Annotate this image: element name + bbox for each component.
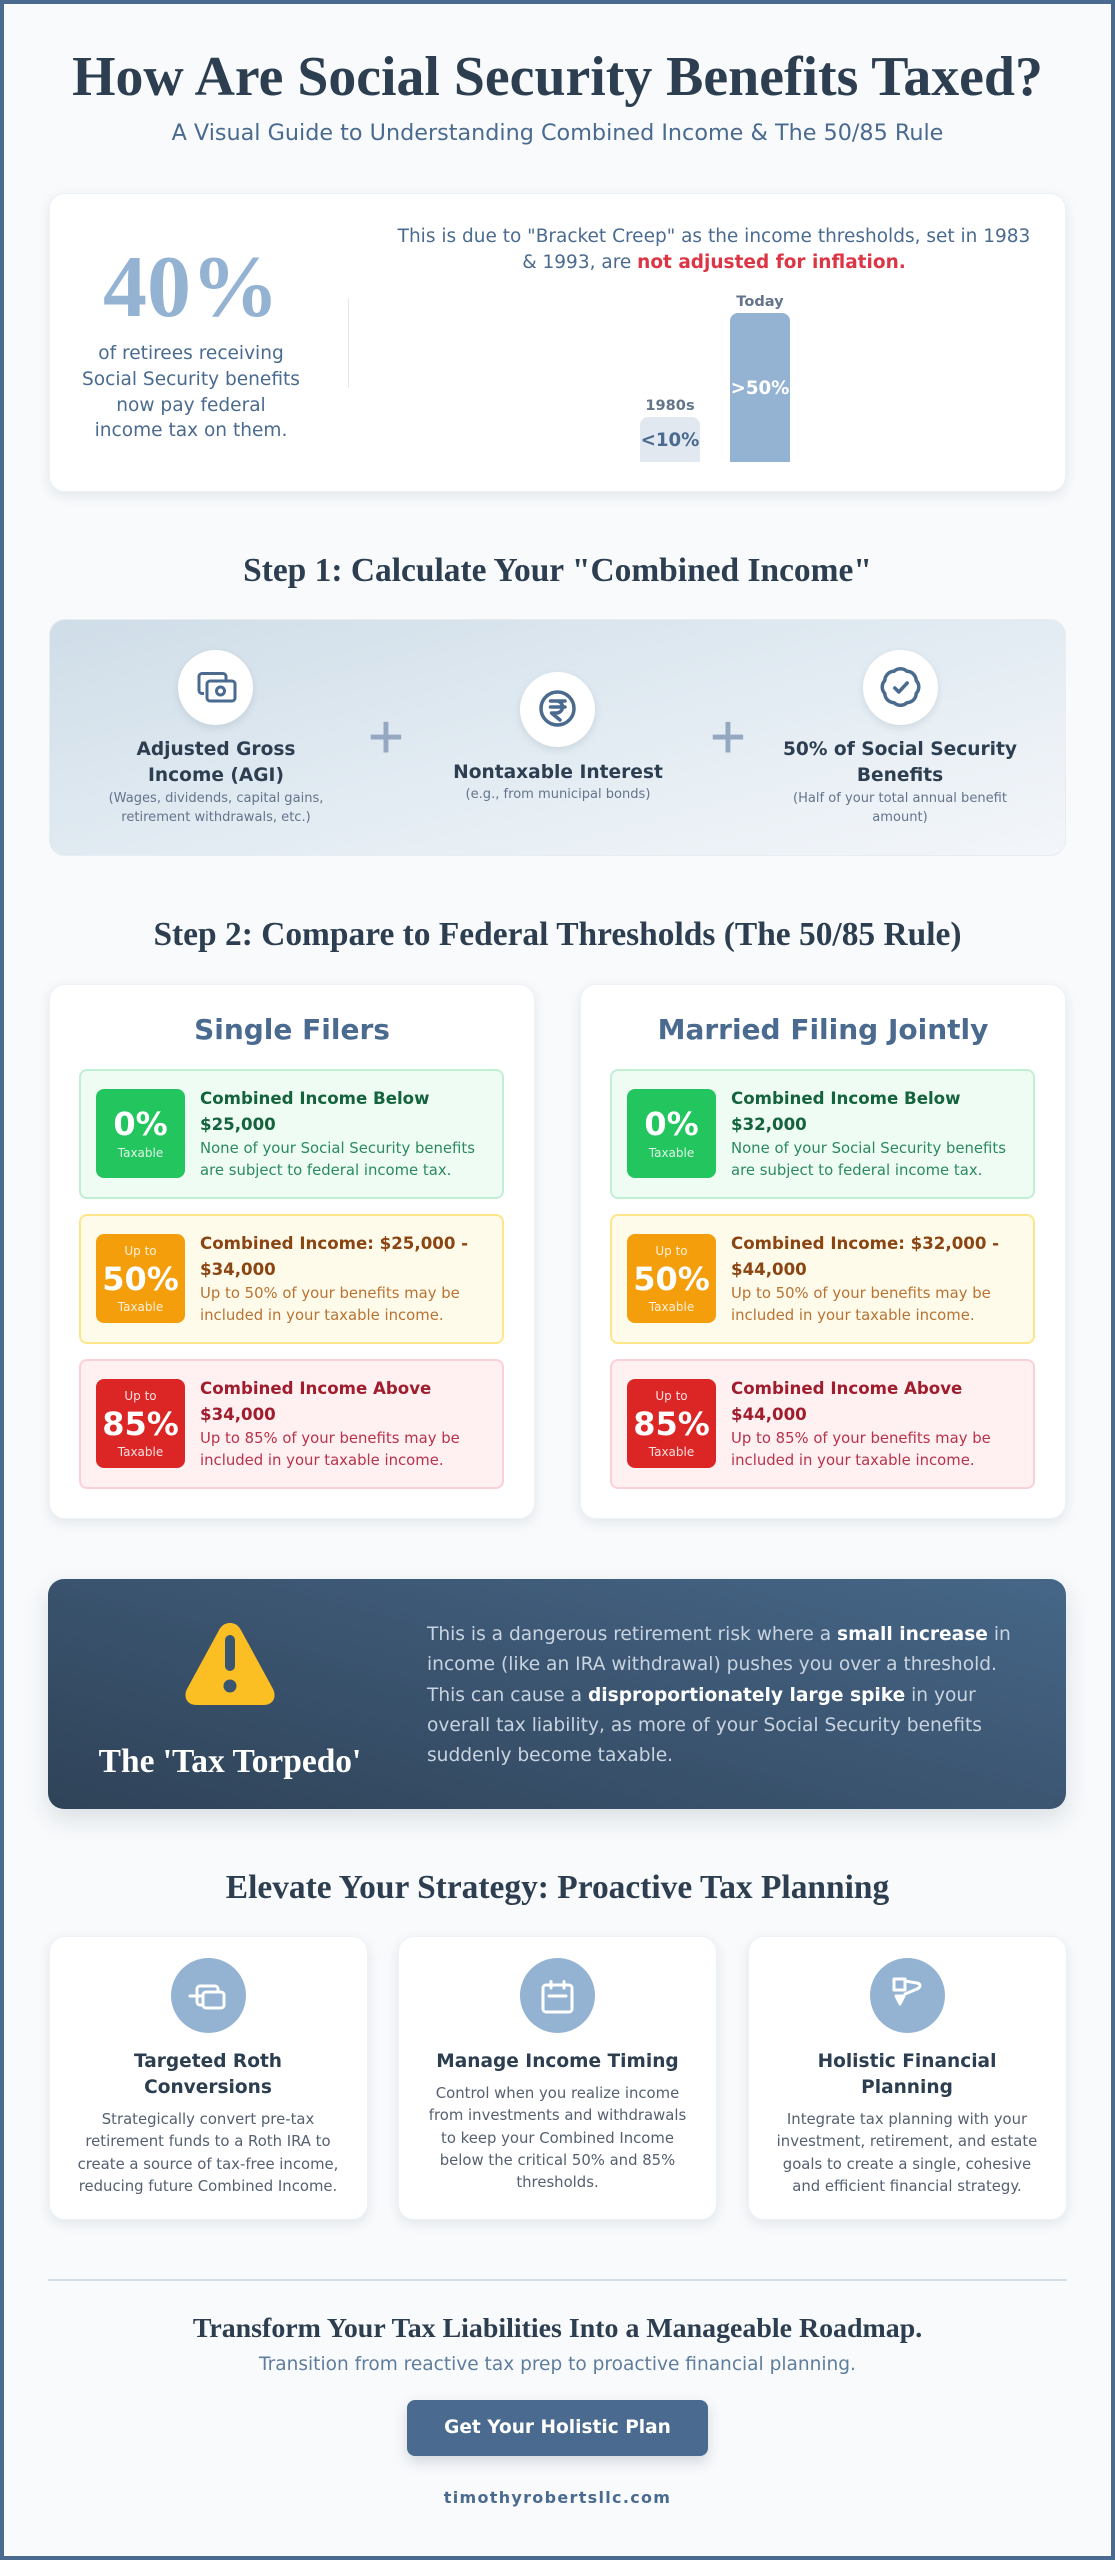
stat description bbox=[82, 343, 300, 441]
stat description: income tax on them. bbox=[95, 420, 287, 441]
tier heading: Combined Income: $25,000 - bbox=[200, 1234, 468, 1253]
tier heading: $34,000 bbox=[200, 1260, 276, 1279]
strategy description: to keep your Combined Income bbox=[441, 2129, 674, 2147]
strategy description bbox=[777, 2110, 1037, 2195]
note: nontaxable interest: (e.g., from municipal bonds) bbox=[466, 787, 650, 802]
item: AGI bbox=[109, 650, 323, 825]
item: half of social security bbox=[783, 650, 1017, 825]
strategy description: Integrate tax planning with your bbox=[787, 2110, 1027, 2128]
call to action button bbox=[407, 2400, 708, 2456]
badge: 0%: 0% bbox=[644, 1105, 699, 1143]
tier description: are subject to federal income tax. bbox=[731, 1161, 982, 1179]
heading: step 2: Step 2: Compare to Federal Thresholds (The 50/85 Rule) bbox=[153, 916, 962, 953]
badge: 50%: Taxable bbox=[649, 1300, 694, 1314]
badge: 85% bbox=[627, 1379, 716, 1468]
stat description: now pay federal bbox=[116, 395, 266, 416]
label: AGI bbox=[136, 739, 296, 786]
tier description bbox=[731, 1284, 991, 1324]
tier description: Up to 85% of your benefits may be bbox=[200, 1429, 460, 1447]
tier heading: $44,000 bbox=[731, 1260, 807, 1279]
note: AGI bbox=[109, 791, 323, 825]
tier description: Up to 85% of your benefits may be bbox=[731, 1429, 991, 1447]
vertical divider bbox=[348, 298, 349, 388]
badge: 50%: Up to bbox=[655, 1244, 688, 1258]
badge: 50% bbox=[96, 1234, 185, 1323]
strategy description bbox=[78, 2110, 338, 2195]
card: holistic planning bbox=[748, 1936, 1066, 2220]
callout body bbox=[426, 1624, 1011, 1766]
note: half of social security: amount) bbox=[872, 810, 928, 825]
tier: 85 percent bbox=[610, 1359, 1035, 1489]
strategy description: Control when you realize income bbox=[436, 2084, 679, 2102]
website: timothyrobertsllc.com bbox=[444, 2488, 671, 2507]
badge: 0%: Taxable bbox=[118, 1146, 163, 1160]
title: How Are Social Security Benefits Taxed? bbox=[72, 46, 1043, 108]
label: AGI: Adjusted Gross bbox=[136, 739, 296, 760]
callout body: This is a dangerous retirement risk where a small increase in bbox=[427, 1624, 1011, 1645]
tier heading bbox=[200, 1234, 468, 1279]
note: half of social security: (Half of your total annual benefit bbox=[793, 791, 1007, 806]
icon: calendar bbox=[520, 1958, 595, 2033]
card: income timing bbox=[398, 1936, 717, 2220]
footer heading: Transform Your Tax Liabilities Into a Manageable Roadmap. bbox=[193, 2313, 922, 2344]
strategy description: retirement funds to a Roth IRA to bbox=[85, 2132, 331, 2150]
tier heading bbox=[731, 1379, 962, 1424]
badge: 0%: 0% bbox=[113, 1105, 168, 1143]
icon: planning pen bbox=[870, 1958, 945, 2033]
plus sign: + bbox=[708, 709, 748, 764]
tier: 0 percent bbox=[610, 1069, 1035, 1199]
strategy title: Holistic Financial bbox=[818, 2051, 996, 2072]
subtitle: A Visual Guide to Understanding Combined Income & The 50/85 Rule bbox=[172, 120, 943, 146]
tier: 85 percent bbox=[79, 1359, 504, 1489]
strategy description: Strategically convert pre-tax bbox=[102, 2110, 314, 2128]
label: AGI: Income (AGI) bbox=[148, 765, 284, 786]
badge: 50%: 50% bbox=[102, 1260, 179, 1298]
strategy description: thresholds. bbox=[516, 2173, 599, 2191]
card: Roth conversions bbox=[48, 1936, 368, 2220]
tier: 50 percent bbox=[610, 1214, 1035, 1344]
badge: 0% bbox=[627, 1089, 716, 1178]
strategy title: Targeted Roth bbox=[134, 2051, 282, 2072]
stat description: Social Security benefits bbox=[82, 369, 300, 390]
tier heading: Combined Income Above bbox=[731, 1379, 962, 1398]
tier heading: $32,000 bbox=[731, 1115, 807, 1134]
bracket creep explanation: & 1993, are not adjusted for inflation. bbox=[522, 252, 906, 273]
strategy description bbox=[429, 2084, 686, 2191]
tier heading: Combined Income Below bbox=[731, 1089, 960, 1108]
badge: 0%: Taxable bbox=[649, 1146, 694, 1160]
badge: 85%: Up to bbox=[124, 1389, 157, 1403]
label: 1980s: 1980s bbox=[645, 397, 695, 414]
tier description: Up to 50% of your benefits may be bbox=[200, 1284, 460, 1302]
badge: 85%: Taxable bbox=[649, 1445, 694, 1459]
column title: Single Filers bbox=[194, 1013, 390, 1046]
tier heading: $44,000 bbox=[731, 1405, 807, 1424]
bracket creep explanation: This is due to "Bracket Creep" as the income thresholds, set in 1983 bbox=[398, 226, 1030, 247]
callout body: This can cause a disproportionately large spike in your bbox=[427, 1684, 976, 1706]
badge: 85%: 85% bbox=[633, 1405, 710, 1443]
tier: 0 percent bbox=[79, 1069, 504, 1199]
strategy description: goals to create a single, cohesive bbox=[783, 2155, 1031, 2173]
badge: 50% bbox=[627, 1234, 716, 1323]
tier heading: $25,000 bbox=[200, 1115, 276, 1134]
callout body: overall tax liability, as more of your Social Security benefits bbox=[427, 1715, 982, 1736]
label: half of social security bbox=[783, 739, 1017, 786]
tier description bbox=[200, 1429, 460, 1469]
badge: 50%: 50% bbox=[633, 1260, 710, 1298]
panel: combined income formula bbox=[49, 619, 1066, 856]
section divider bbox=[48, 2279, 1067, 2281]
badge: 85% bbox=[96, 1379, 185, 1468]
badge: 85%: Up to bbox=[655, 1389, 688, 1403]
bar: today bbox=[730, 313, 790, 462]
strategy title: Conversions bbox=[144, 2077, 272, 2098]
strategy title: Manage Income Timing bbox=[436, 2051, 679, 2072]
tier description: None of your Social Security benefits bbox=[200, 1139, 475, 1157]
tier heading: Combined Income: $32,000 - bbox=[731, 1234, 999, 1253]
label: today: Today bbox=[736, 293, 784, 310]
strategy title: Planning bbox=[861, 2077, 953, 2098]
column title: Married Filing Jointly bbox=[658, 1013, 988, 1046]
tier heading: Combined Income Above bbox=[200, 1379, 431, 1398]
callout body: suddenly become taxable. bbox=[427, 1745, 673, 1766]
badge: 50%: Up to bbox=[124, 1244, 157, 1258]
note: half of social security bbox=[793, 791, 1007, 825]
strategy description: reducing future Combined Income. bbox=[79, 2177, 337, 2195]
label: nontaxable interest: Nontaxable Interest bbox=[453, 762, 663, 783]
tier description: Up to 50% of your benefits may be bbox=[731, 1284, 991, 1302]
stat description: of retirees receiving bbox=[98, 343, 284, 364]
item: nontaxable interest bbox=[453, 672, 663, 802]
badge: 50%: Taxable bbox=[118, 1300, 163, 1314]
tier heading: $34,000 bbox=[200, 1405, 276, 1424]
tier description: included in your taxable income. bbox=[200, 1451, 444, 1469]
callout title: The 'Tax Torpedo' bbox=[99, 1743, 361, 1780]
tier: 50 percent bbox=[79, 1214, 504, 1344]
panel: 40 percent statistic and bracket creep bbox=[49, 193, 1066, 492]
bar: today: >50% bbox=[731, 378, 789, 399]
strategy title bbox=[818, 2051, 996, 2098]
tier description bbox=[731, 1139, 1006, 1179]
tier description: included in your taxable income. bbox=[731, 1451, 975, 1469]
big stat 40%: 40% bbox=[103, 239, 279, 336]
panel: single filers bbox=[49, 984, 535, 1519]
tier heading bbox=[200, 1379, 431, 1424]
callout body: income (like an IRA withdrawal) pushes you over a threshold. bbox=[427, 1654, 997, 1675]
icon: conversion bbox=[171, 1958, 246, 2033]
strategy description: investment, retirement, and estate bbox=[777, 2132, 1037, 2150]
icon: warning triangle bbox=[185, 1623, 275, 1705]
tier description bbox=[200, 1139, 475, 1179]
bar: 1980s bbox=[640, 417, 700, 462]
badge: 0% bbox=[96, 1089, 185, 1178]
note: AGI: (Wages, dividends, capital gains, bbox=[109, 791, 323, 806]
tier heading bbox=[731, 1089, 960, 1134]
tier description: included in your taxable income. bbox=[731, 1306, 975, 1324]
icon: rupee coin bbox=[519, 672, 596, 751]
heading: step 1: Step 1: Calculate Your "Combined Income" bbox=[243, 552, 872, 589]
label: half of social security: 50% of Social Security bbox=[783, 739, 1017, 760]
tier heading bbox=[200, 1089, 429, 1134]
strategy description: below the critical 50% and 85% bbox=[440, 2151, 675, 2169]
bar: 1980s: <10% bbox=[641, 430, 699, 451]
icon: cash stack bbox=[177, 650, 254, 729]
note: AGI: retirement withdrawals, etc.) bbox=[121, 810, 311, 825]
footer subheading: Transition from reactive tax prep to proactive financial planning. bbox=[259, 2354, 856, 2375]
strategy description: create a source of tax-free income, bbox=[78, 2155, 338, 2173]
tier description: None of your Social Security benefits bbox=[731, 1139, 1006, 1157]
tier description bbox=[200, 1284, 460, 1324]
plus sign: + bbox=[366, 709, 406, 764]
tier heading: Combined Income Below bbox=[200, 1089, 429, 1108]
tier description: are subject to federal income tax. bbox=[200, 1161, 451, 1179]
strategy title bbox=[134, 2051, 282, 2098]
badge: 85%: 85% bbox=[102, 1405, 179, 1443]
tier description: included in your taxable income. bbox=[200, 1306, 444, 1324]
tier description bbox=[731, 1429, 991, 1469]
call to action button: Get Your Holistic Plan bbox=[444, 2417, 671, 2438]
label: half of social security: Benefits bbox=[857, 765, 943, 786]
panel: tax torpedo callout bbox=[48, 1579, 1066, 1809]
strategy description: and efficient financial strategy. bbox=[792, 2177, 1022, 2195]
strategy description: from investments and withdrawals bbox=[429, 2106, 686, 2124]
panel: married filing jointly bbox=[580, 984, 1066, 1519]
bracket creep explanation bbox=[398, 226, 1030, 273]
icon: verified badge bbox=[862, 650, 939, 729]
bar chart: 1980s vs today bbox=[640, 293, 790, 462]
tier heading bbox=[731, 1234, 999, 1279]
badge: 85%: Taxable bbox=[118, 1445, 163, 1459]
heading: proactive tax planning: Elevate Your Strategy: Proactive Tax Planning bbox=[226, 1869, 889, 1906]
